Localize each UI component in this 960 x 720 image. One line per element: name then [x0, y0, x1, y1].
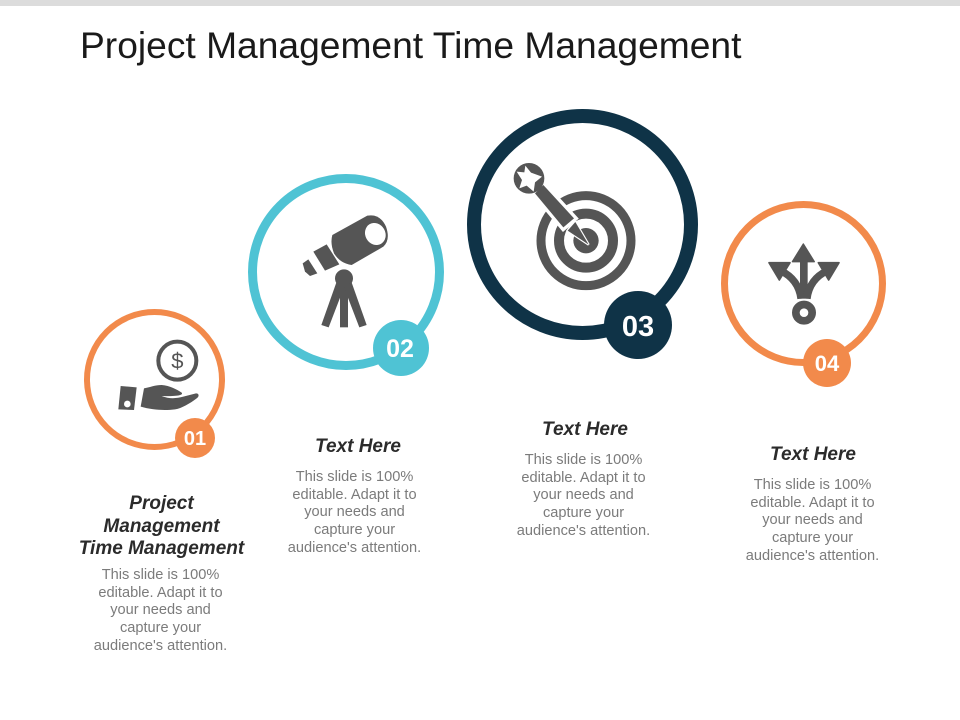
body: step 4 [746, 477, 879, 564]
icon: hand holding dollar coin [118, 342, 199, 410]
heading: step 1: Project [129, 493, 194, 514]
body: step 2: This slide is 100% [296, 469, 413, 485]
body: step 4: capture your [772, 530, 853, 546]
body: step 3 [517, 452, 650, 539]
body: step 1 [94, 567, 227, 654]
text block: step 1 [79, 493, 245, 654]
body: step 3: editable. Adapt it to [521, 470, 646, 486]
body: step 1: audience's attention. [94, 638, 227, 654]
text block: step 4 [746, 444, 879, 564]
body: step 2: audience's attention. [288, 540, 421, 556]
panel: step 4 graphic [724, 204, 882, 387]
body: step 4: This slide is 100% [754, 477, 871, 493]
panel: step 2 graphic [252, 178, 440, 376]
heading: step 3: Text Here [542, 419, 628, 440]
body: step 3: This slide is 100% [525, 452, 642, 468]
panel: step 1 graphic [87, 312, 222, 458]
badge 01 [175, 418, 215, 458]
panel: step 3 graphic [474, 116, 691, 359]
badge 02 [373, 320, 429, 376]
body: step 1: your needs and [110, 602, 211, 618]
text block: step 2 [288, 436, 421, 556]
badge 03 [604, 291, 672, 359]
heading: step 1: Time Management [79, 538, 245, 559]
title: Project Management Time Management [80, 24, 742, 66]
icon: telescope [303, 215, 390, 327]
heading: step 1: Management [103, 516, 220, 537]
heading: step 4: Text Here [770, 444, 856, 465]
body: step 2: capture your [314, 522, 395, 538]
body: step 1: editable. Adapt it to [98, 585, 223, 601]
body: step 1: This slide is 100% [102, 567, 219, 583]
body: step 2: your needs and [304, 504, 405, 520]
body: step 4: audience's attention. [746, 548, 879, 564]
icon: target with dart [514, 163, 631, 286]
badge 04 [803, 339, 851, 387]
badge 03: 03 [622, 311, 654, 343]
body: step 4: editable. Adapt it to [750, 495, 875, 511]
badge 04: 04 [815, 351, 840, 376]
body: step 4: your needs and [762, 512, 863, 528]
body: step 3: audience's attention. [517, 523, 650, 539]
body: step 2 [288, 469, 421, 556]
badge 01: 01 [184, 428, 206, 450]
body: step 3: capture your [543, 505, 624, 521]
heading: step 1 [79, 493, 245, 559]
body: step 3: your needs and [533, 487, 634, 503]
body: step 1: capture your [120, 620, 201, 636]
text block: step 3 [517, 419, 650, 539]
badge 02: 02 [386, 335, 414, 363]
icon: hand holding dollar coin: $ [171, 349, 183, 374]
icon: diverging arrows [769, 244, 839, 321]
heading: step 2: Text Here [315, 436, 401, 457]
body: step 2: editable. Adapt it to [292, 487, 417, 503]
